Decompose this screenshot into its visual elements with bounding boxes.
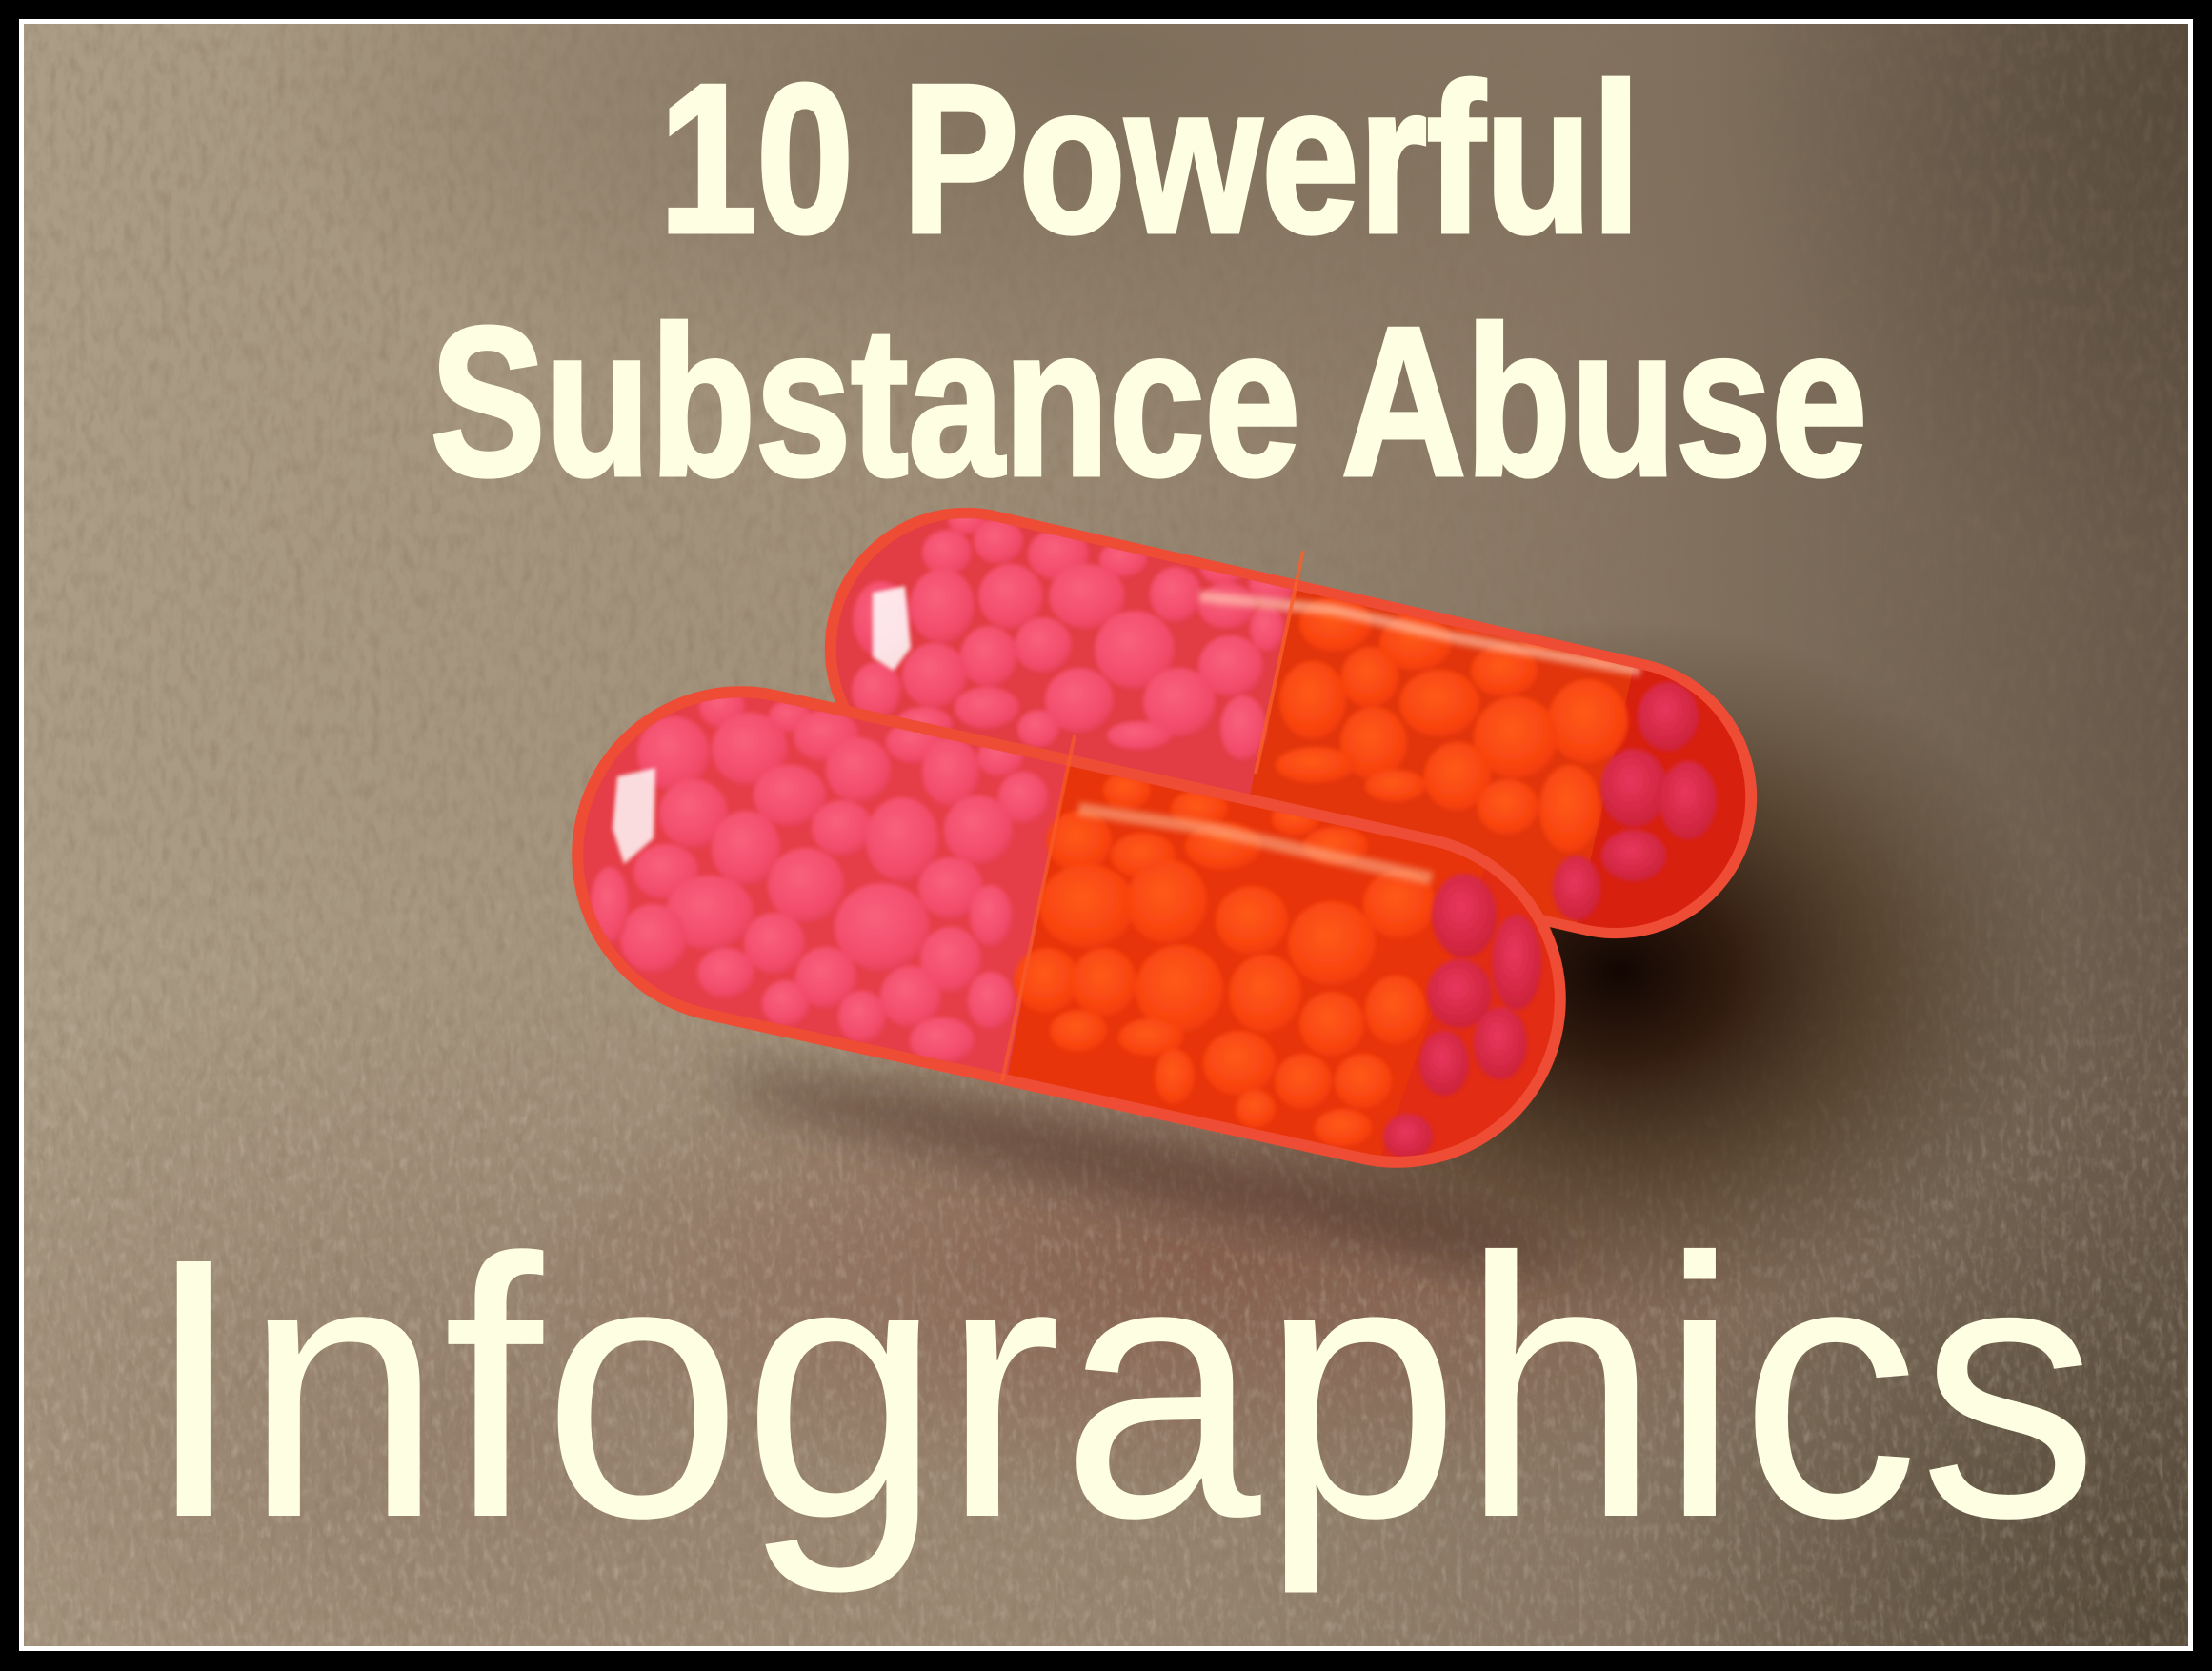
- front capsule: pink beads: [591, 686, 1048, 1063]
- title line 2: Substance Abuse: [431, 284, 1867, 520]
- title line 3: Infographics: [144, 1182, 2099, 1597]
- back capsule: orange beads: [1276, 568, 1628, 853]
- front capsule: orange beads: [1015, 772, 1436, 1147]
- back capsule: orange half: [1250, 591, 1745, 928]
- front capsule: dark right cap: [1372, 838, 1667, 1238]
- front capsule: light streak: [1078, 809, 1432, 878]
- front capsule: pink half fill: [562, 667, 1096, 1143]
- front capsule: glint: [613, 768, 655, 864]
- title line 1: 10 Powerful: [659, 41, 1640, 277]
- back capsule: [825, 507, 1757, 939]
- back capsule: end beads: [1551, 680, 1719, 922]
- back capsule: pink half fill: [836, 520, 1292, 795]
- back capsule: pink beads: [852, 506, 1295, 760]
- front capsule: seam: [1002, 735, 1075, 1081]
- front capsule: end beads: [1383, 874, 1541, 1159]
- back capsule: light streak: [1199, 596, 1640, 671]
- back capsule: dark right cap: [1577, 668, 1745, 928]
- front capsule: [539, 654, 1667, 1238]
- back capsule: seam: [1256, 551, 1303, 774]
- back capsule: glint: [873, 586, 911, 671]
- front capsule: orange half: [1000, 724, 1667, 1238]
